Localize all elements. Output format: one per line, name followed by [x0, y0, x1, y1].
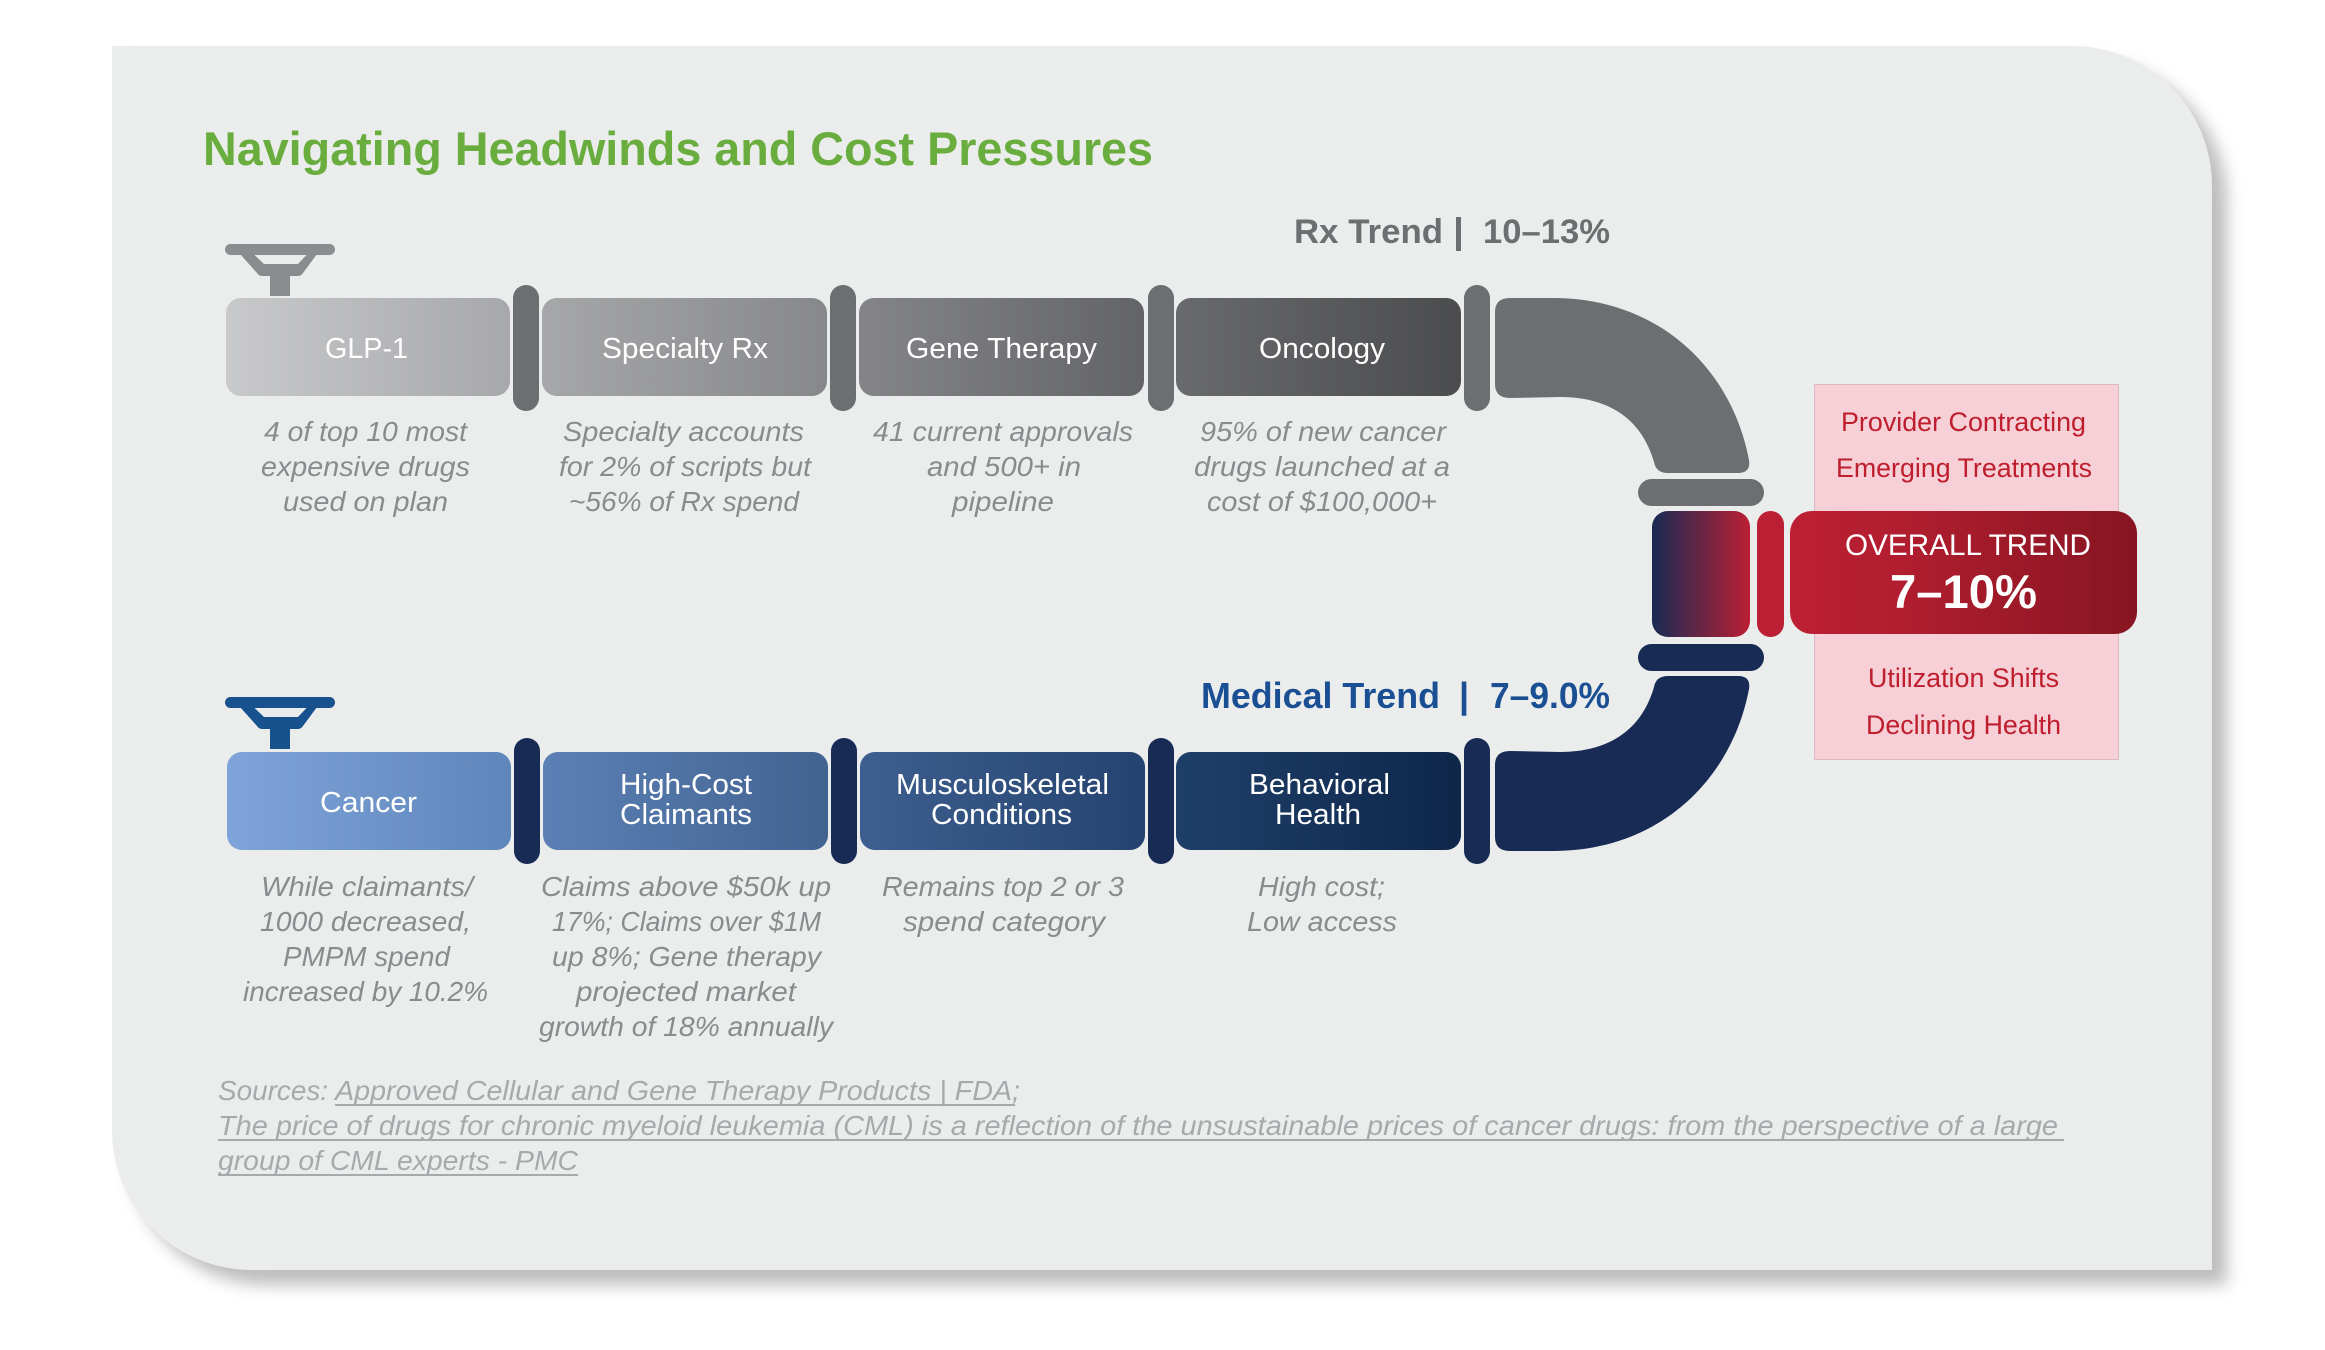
pipe stage: Musculoskeletal Conditions: Remains top 2 or 3 — [882, 871, 1124, 902]
pipe stage: GLP-1: 4 of top 10 most — [264, 416, 468, 447]
text block: sources — [218, 1075, 2064, 1176]
flange — [1148, 738, 1174, 864]
text block: sources: Approved Cellular and Gene Therapy Products | FDA; — [333, 1075, 1020, 1106]
pipe stage: High-Cost Claimants: projected market — [575, 976, 797, 1007]
heading: Rx trend: Rx Trend — [1294, 213, 1443, 251]
panel: pink trend drivers: Declining Health — [1866, 710, 2061, 740]
flange: gray horizontal — [1638, 479, 1764, 506]
pipe stage: Gene Therapy: Gene Therapy — [906, 333, 1098, 365]
pipe stage: Behavioral Health: Health — [1275, 799, 1361, 831]
pipe stage: GLP-1 — [226, 298, 510, 517]
pipe stage: Oncology: cost of $100,000+ — [1207, 486, 1437, 517]
pipe stage: Behavioral Health: Low access — [1247, 906, 1397, 937]
pipe stage: Cancer: increased by 10.2% — [243, 976, 488, 1007]
flange — [1148, 285, 1174, 411]
pipe stage: GLP-1: GLP-1 — [325, 333, 408, 365]
pipe stage: Specialty Rx: for 2% of scripts but — [559, 451, 812, 482]
pipe stage: Cancer — [227, 752, 511, 1007]
flange — [830, 285, 856, 411]
pipe stage: Musculoskeletal Conditions: Conditions — [931, 799, 1072, 831]
flange — [831, 738, 857, 864]
title: Navigating Headwinds and Cost Pressures — [203, 122, 1153, 175]
pipe stage: High-Cost Claimants: growth of 18% annually — [539, 1011, 835, 1042]
pipe stage: Behavioral Health: High cost; — [1258, 871, 1385, 902]
text block: sources: The price of drugs for chronic myeloid leukemia (CML) is a reflection of the unsustainable prices of cancer drugs: from the perspective of a large — [218, 1110, 2058, 1141]
flange — [1464, 285, 1490, 411]
pipe stage: Gene Therapy: pipeline — [951, 486, 1054, 517]
heading: Rx trend: 10–13% — [1483, 213, 1610, 251]
pipe stage: GLP-1: expensive drugs — [261, 451, 470, 482]
callout: overall trend — [1790, 511, 2137, 634]
pipe stage: Oncology: drugs launched at a — [1194, 451, 1450, 482]
pipe stage: Oncology: 95% of new cancer — [1200, 416, 1448, 447]
heading: Rx trend — [1294, 213, 1610, 251]
heading: Medical trend: | — [1459, 675, 1469, 717]
pipe stage: High-Cost Claimants: up 8%; Gene therapy — [552, 941, 823, 972]
pipe stage: Specialty Rx: Specialty Rx — [602, 333, 769, 365]
pipe stage: Specialty Rx: Specialty accounts — [563, 416, 804, 447]
heading: Medical trend — [1201, 675, 1610, 717]
heading: Medical trend: Medical Trend — [1201, 675, 1440, 716]
panel: pink trend drivers — [1814, 384, 2118, 760]
flange — [513, 285, 539, 411]
heading: Medical trend: 7–9.0% — [1490, 675, 1610, 716]
pipe stage: Oncology: Oncology — [1259, 333, 1386, 365]
pipe stage: Gene Therapy: and 500+ in — [927, 451, 1081, 482]
icon: blue valve — [225, 697, 335, 749]
text block: sources: group of CML experts - PMC — [218, 1145, 579, 1176]
pipe stage: Gene Therapy — [859, 298, 1144, 517]
pipe stage: High-Cost Claimants: Claims above $50k up — [541, 871, 831, 902]
pipe stage: Cancer: While claimants/ — [261, 871, 476, 902]
pipe stage: Musculoskeletal Conditions: spend category — [903, 906, 1107, 937]
pipe stage: Behavioral Health — [1176, 752, 1461, 937]
pipe stage: High-Cost Claimants: High-Cost — [620, 769, 752, 801]
pipe stage: Gene Therapy: 41 current approvals — [873, 416, 1133, 447]
pipe stage: High-Cost Claimants — [539, 752, 835, 1042]
panel: pink trend drivers: Provider Contracting — [1841, 407, 2086, 437]
pipe stage: Musculoskeletal Conditions: Musculoskeletal — [896, 769, 1109, 801]
text block: sources: Sources: — [218, 1075, 328, 1106]
callout: overall trend: 7–10% — [1890, 565, 2037, 618]
icon: gray valve — [225, 244, 335, 296]
pipe stage: GLP-1: used on plan — [283, 486, 448, 517]
pipe stage: Oncology — [1176, 298, 1461, 517]
flange: navy horizontal — [1638, 644, 1764, 671]
pipe stage: Cancer: PMPM spend — [283, 941, 451, 972]
pipe elbow: navy — [1495, 676, 1749, 851]
pipe stage: Musculoskeletal Conditions — [860, 752, 1145, 937]
pipe stage: High-Cost Claimants: 17%; Claims over $1M — [552, 906, 822, 937]
callout: overall trend: OVERALL TREND — [1845, 529, 2091, 562]
pipe elbow: gray — [1495, 298, 1749, 473]
pipe stage: Specialty Rx — [542, 298, 827, 517]
flange: red — [1757, 511, 1784, 637]
pipe stage: Specialty Rx: ~56% of Rx spend — [569, 486, 800, 517]
panel: pink trend drivers: Utilization Shifts — [1868, 663, 2059, 693]
panel: pink trend drivers: Emerging Treatments — [1836, 453, 2092, 483]
flange — [514, 738, 540, 864]
pipe stage: Behavioral Health: Behavioral — [1249, 769, 1390, 801]
pipe stage: Cancer: Cancer — [320, 787, 417, 819]
flange — [1464, 738, 1490, 864]
pipe stage: High-Cost Claimants: Claimants — [620, 799, 752, 831]
pipe stage: Cancer: 1000 decreased, — [260, 906, 471, 937]
pipe junction: navy to red — [1652, 511, 1750, 637]
